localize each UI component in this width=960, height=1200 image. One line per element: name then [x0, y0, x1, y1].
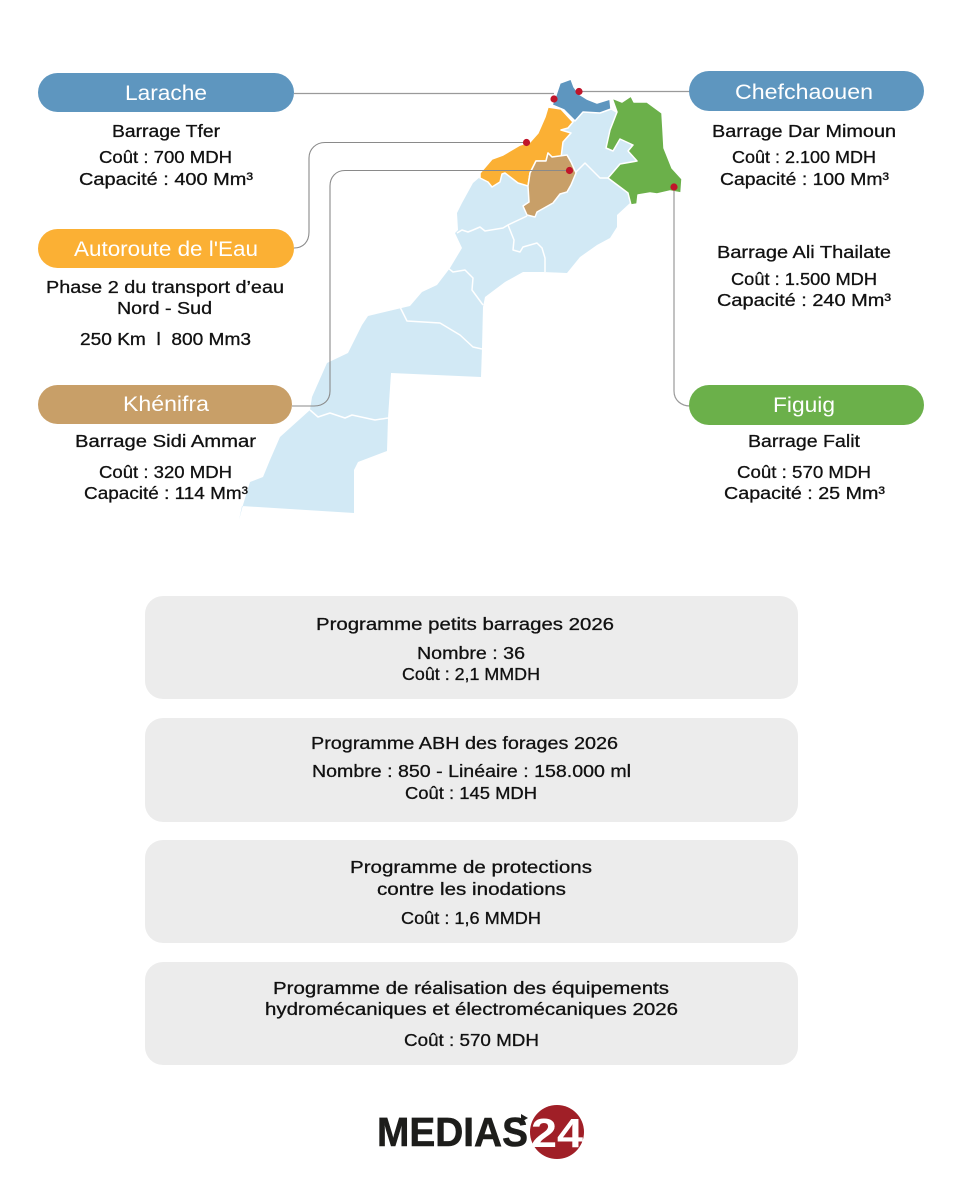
- panel: protections contre les inondations: Programme de protections: [350, 857, 592, 877]
- panel: équipements hydromécaniques: Coût : 570 MDH: [404, 1030, 539, 1050]
- details: Barrage Dar Mimoun: Barrage Dar Mimoun: [712, 121, 896, 141]
- panel: petits barrages: Programme petits barrages 2026: [316, 614, 614, 634]
- pill: Figuig: [689, 385, 924, 425]
- panel: équipements hydromécaniques: [145, 962, 798, 1065]
- region: Autoroute de l'Eau: [480, 107, 573, 187]
- panel: équipements hydromécaniques: Programme de réalisation des équipements: [273, 978, 669, 998]
- details: Barrage Falit: Barrage Falit: [748, 431, 860, 451]
- details: Barrage Ali Thailate: Barrage Ali Thailate: [717, 242, 891, 262]
- details: Barrage Sidi Ammar: [75, 431, 256, 503]
- region: Larache: [552, 79, 611, 121]
- block: Khénifra: [38, 385, 292, 503]
- logo: Medias24: 24: [531, 1110, 583, 1156]
- pill: Chefchaouen: [689, 71, 924, 111]
- block: Larache: [38, 73, 294, 189]
- panel: protections contre les inondations: [145, 840, 798, 943]
- heading: Figuig: Figuig: [773, 394, 835, 417]
- details: transport d'eau: Phase 2 du transport d’eau: [46, 277, 284, 297]
- heading: Chefchaouen: Chefchaouen: [735, 81, 873, 104]
- panel: petits barrages: [145, 596, 798, 699]
- heading: Larache: Larache: [125, 82, 207, 105]
- connector: Autoroute de l'Eau: [294, 142, 526, 248]
- connector: Figuig: [674, 187, 690, 406]
- details: Barrage Falit: Coût : 570 MDH: [737, 462, 871, 482]
- details: Barrage Tfer: [79, 121, 253, 189]
- details: Barrage Ali Thailate: Capacité : 240 Mm³: [717, 290, 891, 310]
- panel: protections contre les inondations: contre les inodations: [377, 879, 566, 899]
- location markers: [523, 88, 678, 191]
- map of Morocco: [239, 79, 682, 520]
- panel: forages ABH: [145, 718, 798, 822]
- panel: protections contre les inondations: Coût : 1,6 MMDH: [401, 908, 541, 928]
- connector: Khénifra: [292, 170, 569, 406]
- details: Barrage Tfer: Capacité : 400 Mm³: [79, 169, 253, 189]
- details: Barrage Tfer: Barrage Tfer: [112, 121, 220, 141]
- logo: Medias24: MEDIAS: [377, 1109, 528, 1155]
- pill: Larache: [38, 73, 294, 112]
- details: Barrage Dar Mimoun: Capacité : 100 Mm³: [720, 169, 889, 189]
- panel: forages ABH: Coût : 145 MDH: [405, 783, 537, 803]
- details: Barrage Sidi Ammar: Barrage Sidi Ammar: [75, 431, 256, 451]
- panel: petits barrages: Coût : 2,1 MMDH: [402, 664, 540, 684]
- details: Barrage Sidi Ammar: Coût : 320 MDH: [99, 462, 232, 482]
- panel: forages ABH: Programme ABH des forages 2026: [311, 733, 618, 753]
- details: Barrage Tfer: Coût : 700 MDH: [99, 147, 232, 167]
- details: transport d'eau: Nord - Sud: [117, 298, 212, 318]
- region: Chefchaouen and Figuig: [606, 96, 682, 205]
- pill: Khénifra: [38, 385, 292, 424]
- panel: forages ABH: Nombre : 850 - Linéaire : 158.000 ml: [312, 761, 631, 781]
- block: Autoroute de l'Eau: [38, 229, 294, 349]
- block: Figuig: [689, 385, 924, 503]
- block: Chefchaouen: [689, 71, 924, 189]
- details: Barrage Ali Thailate: Coût : 1.500 MDH: [731, 269, 877, 289]
- panel: équipements hydromécaniques: hydromécaniques et électromécaniques 2026: [265, 999, 678, 1019]
- region: Khénifra: [523, 153, 576, 217]
- connector: Chefchaouen: [579, 90, 690, 92]
- logo: Medias24: [377, 1105, 584, 1159]
- heading: Autoroute de l'Eau: Autoroute de l'Eau: [74, 238, 258, 261]
- connector: Larache: [294, 92, 554, 94]
- details: Barrage Dar Mimoun: [712, 121, 896, 189]
- details: Barrage Sidi Ammar: Capacité : 114 Mm³: [84, 483, 248, 503]
- heading: Khénifra: Khénifra: [123, 393, 209, 416]
- panel: petits barrages: Nombre : 36: [417, 643, 525, 663]
- base map region: [239, 109, 640, 520]
- details: Barrage Ali Thailate: [717, 242, 891, 310]
- pill: Autoroute de l'Eau: [38, 229, 294, 268]
- details: Barrage Falit: [724, 431, 885, 503]
- details: Barrage Falit: Capacité : 25 Mm³: [724, 483, 885, 503]
- details: Barrage Dar Mimoun: Coût : 2.100 MDH: [732, 147, 876, 167]
- details: transport d'eau: [46, 277, 284, 349]
- details: transport d'eau: 250 Km l 800 Mm3: [80, 329, 251, 349]
